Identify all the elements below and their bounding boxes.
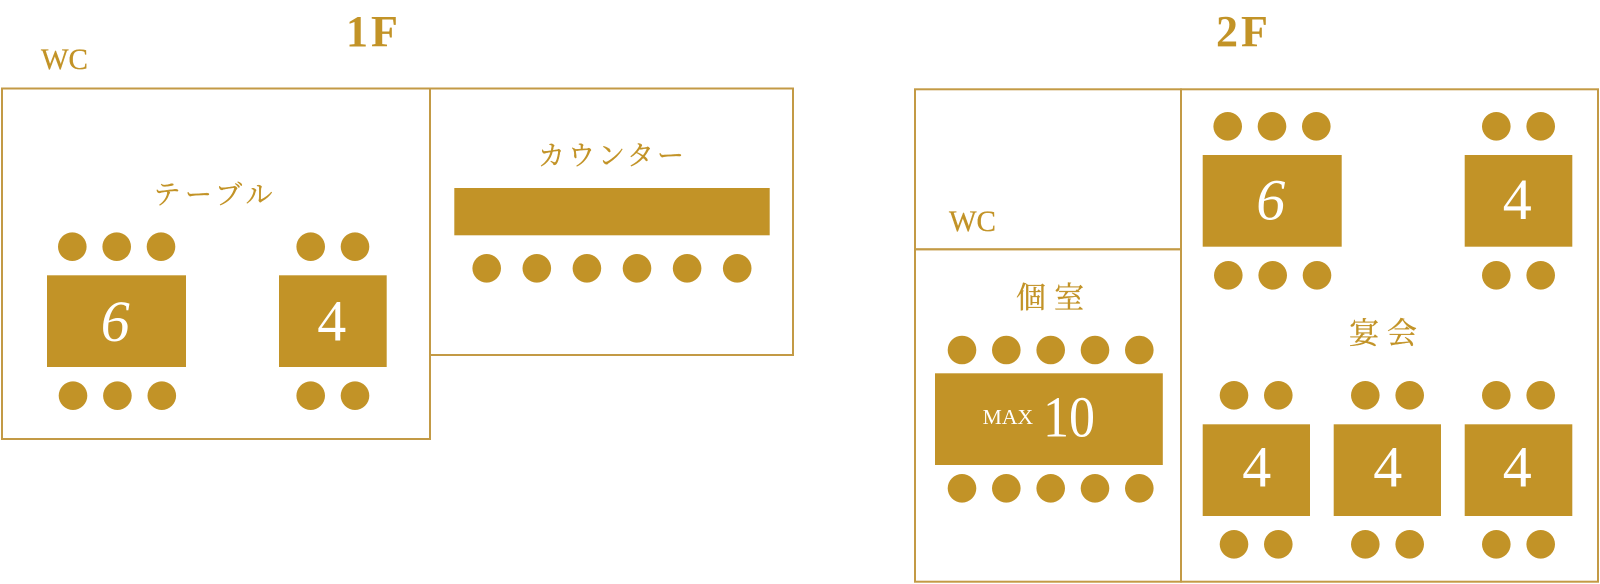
table: upper four-seat bbox=[1465, 155, 1572, 247]
panel: 2F banquet room bbox=[1181, 89, 1598, 582]
table: lower four-seat left: 4 bbox=[1242, 435, 1271, 500]
seats: six-seat bottom bbox=[1214, 261, 1331, 290]
table: counter bbox=[454, 188, 770, 235]
table: lower four-seat centre bbox=[1334, 424, 1441, 516]
panel: 2F WC room bbox=[915, 89, 1181, 249]
heading: 1F: 1F bbox=[346, 7, 398, 56]
table: private room max 10: MAX bbox=[983, 405, 1033, 429]
seats: private room top bbox=[948, 336, 1154, 364]
seats: upper four-seat bottom bbox=[1482, 261, 1555, 290]
table: 2F six-seat: 6 bbox=[1256, 168, 1285, 232]
label: 2F WC: WC bbox=[949, 205, 996, 238]
panel: 1F counter room bbox=[430, 88, 793, 355]
label: counter: カウンター bbox=[538, 141, 684, 171]
table: 1F four-seat: 4 bbox=[317, 289, 346, 354]
table: lower four-seat right bbox=[1465, 424, 1572, 516]
table: lower four-seat centre: 4 bbox=[1373, 435, 1402, 500]
panel: 2F private room bbox=[915, 249, 1181, 582]
seats: 1F four-seat table top bbox=[296, 232, 369, 261]
table: private room max 10: 10 bbox=[1043, 385, 1095, 450]
table: private room max 10 bbox=[935, 373, 1163, 465]
label: table room: テーブル bbox=[154, 180, 272, 210]
panel: 1F table room bbox=[2, 88, 430, 439]
table: upper four-seat: 4 bbox=[1503, 167, 1532, 232]
seats: lower tables top bbox=[1220, 381, 1555, 410]
heading: 2F: 2F bbox=[1216, 7, 1268, 56]
seats: private room bottom bbox=[948, 474, 1154, 503]
seats: 1F six-seat table top bbox=[58, 232, 175, 261]
table: lower four-seat right: 4 bbox=[1503, 435, 1532, 500]
seats: 1F four-seat table bottom bbox=[296, 381, 369, 410]
table: lower four-seat left bbox=[1203, 424, 1310, 516]
seats: six-seat top bbox=[1213, 112, 1331, 141]
label: banquet: 宴会 bbox=[1349, 318, 1417, 350]
table: 1F four-seat bbox=[279, 275, 387, 367]
seats: upper four-seat top bbox=[1482, 112, 1555, 141]
label: 1F WC: WC bbox=[41, 43, 88, 76]
table: 1F six-seat: 6 bbox=[101, 289, 130, 354]
table: 1F six-seat bbox=[47, 275, 186, 367]
table: 2F six-seat bbox=[1203, 155, 1342, 247]
seats: 1F six-seat table bottom bbox=[59, 381, 176, 410]
seats: counter bbox=[472, 254, 752, 283]
seats: lower tables bottom bbox=[1220, 530, 1555, 559]
label: private room: 個室 bbox=[1016, 282, 1084, 315]
